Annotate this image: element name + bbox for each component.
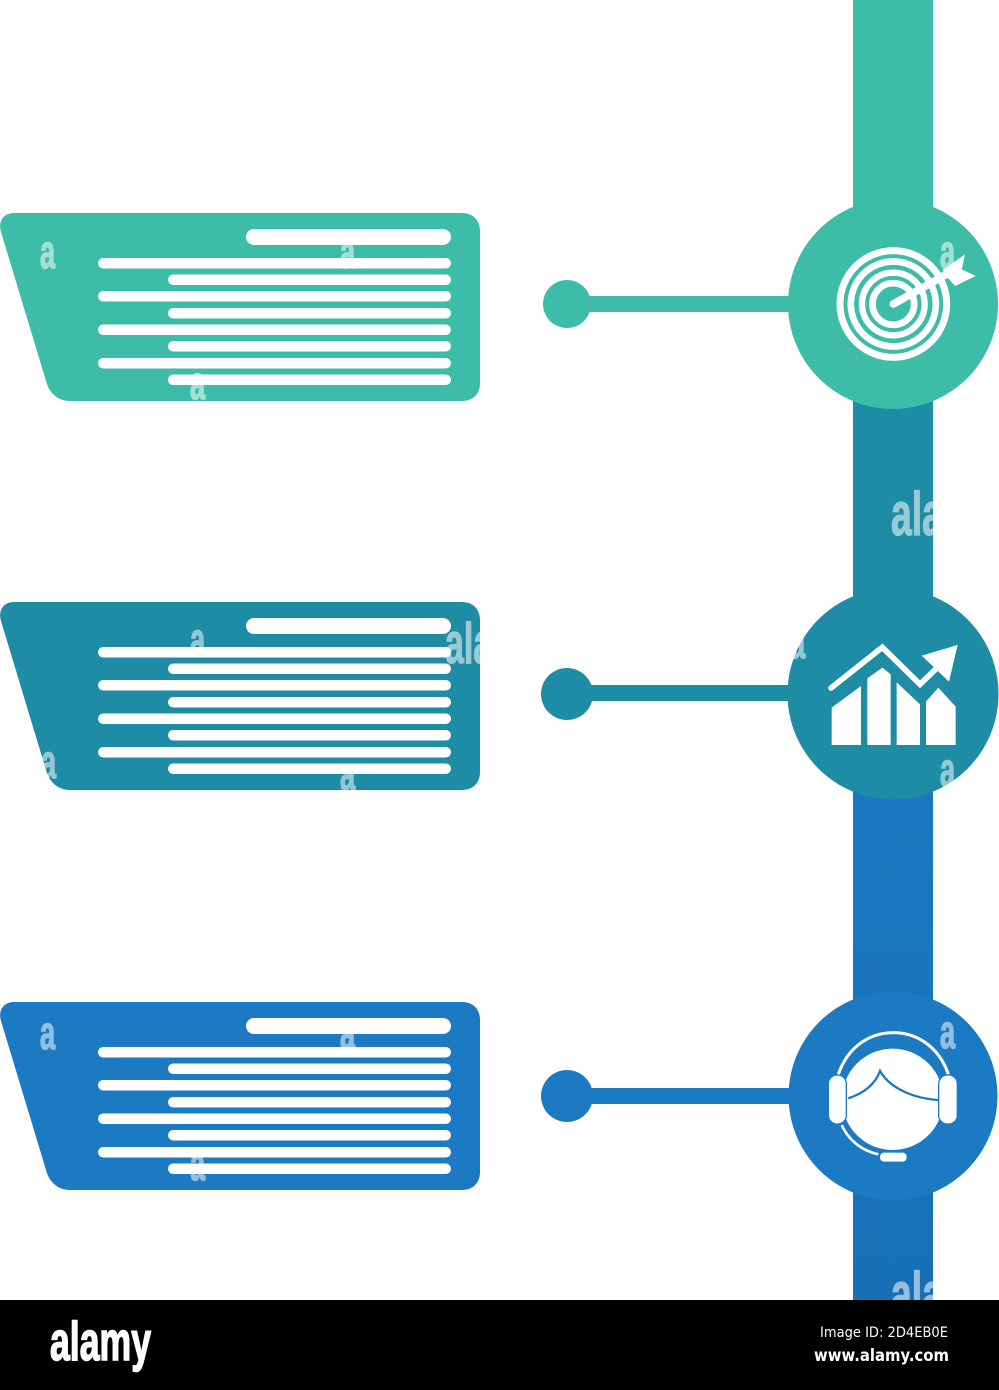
footer image id: Image ID: 2D4EB0E	[820, 1325, 948, 1341]
footer logo: alamy	[50, 1310, 151, 1372]
panel: step 2	[0, 602, 480, 790]
panel 3 text placeholder lines	[98, 1018, 451, 1174]
connector: step 2	[541, 668, 795, 720]
connector: step 3	[541, 1070, 795, 1122]
node circle: step 1	[788, 199, 998, 409]
watermark letters: a	[790, 616, 806, 669]
node circle: step 3	[788, 992, 998, 1200]
footer bar	[0, 1300, 999, 1390]
panel: step 1	[0, 213, 480, 401]
panel 3 background	[0, 1002, 480, 1190]
watermark letters: ala	[445, 611, 493, 675]
icon: rising bar chart	[831, 645, 958, 745]
panel 2 text placeholder lines	[98, 618, 451, 774]
node circle: step 2	[788, 588, 998, 800]
watermark letters: a	[340, 226, 356, 279]
watermark letters: a	[190, 614, 206, 667]
panel 1 text placeholder lines	[98, 229, 451, 385]
watermark letters: a	[40, 226, 56, 279]
watermark letters	[40, 226, 956, 1328]
timeline stem: teal segment	[853, 0, 933, 310]
watermark letters: ala	[891, 1259, 944, 1328]
timeline stem: dark teal segment	[853, 305, 933, 700]
panel 2 background	[0, 602, 480, 790]
connector: step 1	[543, 280, 795, 328]
watermark letters: a	[40, 1007, 56, 1060]
watermark letters: a	[190, 357, 206, 410]
watermark letters: a	[41, 736, 57, 789]
watermark letters: a	[940, 744, 956, 797]
panel: step 3	[0, 1002, 480, 1190]
watermark letters: a	[190, 1138, 206, 1191]
footer url: www.alamy.com	[814, 1346, 949, 1366]
icon: support agent with headset	[828, 1033, 957, 1162]
watermark letters: a	[340, 748, 356, 801]
timeline stem: blue segment	[853, 695, 933, 1300]
watermark letters: a	[940, 226, 956, 279]
icon: target with arrow	[840, 251, 976, 357]
watermark letters: a	[340, 1007, 356, 1060]
watermark letters: ala	[891, 479, 944, 548]
panel 1 background	[0, 213, 480, 401]
watermark letters: a	[940, 1006, 956, 1059]
